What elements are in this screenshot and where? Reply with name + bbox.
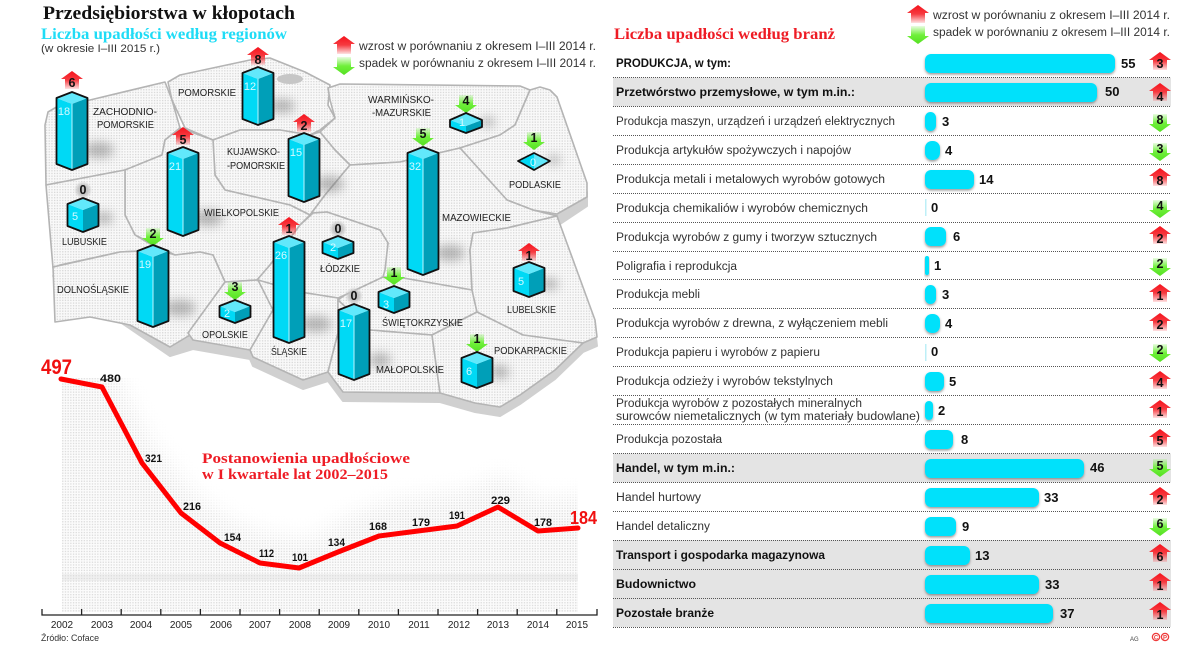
row: guma: 6 — [953, 229, 960, 244]
marker: małopolskie — [338, 287, 370, 380]
marker: lubelskie — [514, 243, 544, 297]
row: detal — [616, 517, 1171, 536]
region: kujawsko-pomorskie — [213, 130, 350, 215]
row: drewno: Produkcja wyrobów z drewna, z wyłączeniem mebli — [616, 318, 888, 330]
marker: dolnośląskie: 19 — [139, 259, 151, 271]
row: meble: Produkcja mebli — [616, 289, 700, 301]
row: guma: Produkcja wyrobów z gumy i tworzyw sztucznych — [616, 232, 877, 244]
dotted chart background — [62, 378, 578, 612]
row: spożywcze: Produkcja artykułów spożywczych i napojów — [616, 145, 852, 157]
grey row backgrounds — [613, 78, 1171, 627]
legend: map: spadek w porównaniu z okresem I–III 2014 r. — [359, 58, 596, 70]
row dividers — [613, 78, 1171, 628]
row: papier — [616, 343, 1171, 362]
region: łódzkie — [257, 212, 388, 298]
row: meble — [616, 284, 1171, 304]
year labels: 2003 — [91, 620, 114, 631]
row: produkcja — [616, 52, 1171, 73]
map labels: PODLASKIE — [509, 179, 561, 191]
row: przetwórstwo: 50 — [1105, 84, 1119, 99]
row: transport: 13 — [975, 548, 989, 563]
row: handel: 46 — [1090, 460, 1104, 475]
year labels: 2008 — [289, 620, 312, 631]
row: budownictwo: 1 — [1157, 579, 1164, 593]
row: spożywcze: 3 — [1157, 142, 1164, 156]
map labels: OPOLSKIE — [202, 329, 248, 341]
row: pozostałe: 1 — [1157, 608, 1164, 622]
row: pozostała: 5 — [1157, 434, 1164, 448]
marker: zachodniopomorskie — [56, 71, 88, 170]
map labels: LUBELSKIE — [507, 304, 556, 316]
lake — [277, 74, 303, 84]
row: pozostała: 8 — [961, 432, 968, 447]
period note: (w okresie I–III 2015 r.) — [41, 43, 160, 55]
marker: śląskie — [274, 217, 304, 343]
marker: warmińsko-mazurskie: 1 — [459, 117, 465, 129]
map labels: ŁÓDZKIE — [320, 262, 360, 275]
region: mazowieckie — [310, 148, 557, 290]
map labels: -POMORSKIE — [227, 160, 285, 172]
region: wielkopolskie — [125, 128, 310, 282]
row: pozostałe — [616, 602, 1171, 623]
row: maszyny: Produkcja maszyn, urządzeń i urządzeń elektrycznych — [616, 116, 895, 128]
row: hurt: 2 — [1157, 493, 1164, 507]
data labels: 229 — [491, 495, 510, 507]
legend: map: wzrost w porównaniu z okresem I–III 2014 r. — [358, 41, 596, 53]
row: minerały: 2 — [938, 403, 945, 418]
marker: pomorskie: 8 — [255, 53, 262, 67]
row: poligrafia — [616, 256, 1171, 276]
map labels: POMORSKIE — [178, 87, 236, 99]
data labels: 101 — [292, 552, 308, 564]
region: lubuskie — [46, 170, 160, 268]
year labels: 2009 — [328, 620, 351, 631]
row: drewno: 4 — [945, 316, 953, 331]
row: minerały: 1 — [1157, 405, 1164, 419]
marker: dolnośląskie — [138, 227, 168, 327]
row: transport: 6 — [1157, 550, 1164, 564]
marker: mazowieckie: 5 — [420, 127, 427, 141]
row: meble: 3 — [942, 287, 949, 302]
region: świętokrzyskie — [338, 277, 477, 335]
row: maszyny — [616, 112, 1171, 132]
row: hurt: Handel hurtowy — [616, 492, 701, 504]
row: przetwórstwo: Przetwórstwo przemysłowe, w tym m.in.: — [616, 87, 855, 99]
row: minerały — [616, 398, 1171, 423]
row: minerały: surowców niemetalicznych (w tym materiały budowlane) — [616, 411, 920, 423]
marker: warmińsko-mazurskie: 4 — [463, 94, 470, 108]
data labels: 321 — [145, 453, 162, 465]
row: odzież: Produkcja odzieży i wyrobów tekstylnych — [616, 376, 833, 388]
row: budownictwo: Budownictwo — [616, 579, 696, 591]
marker: małopolskie: 0 — [351, 289, 358, 303]
marker: opolskie: 3 — [232, 280, 239, 294]
data labels — [41, 356, 597, 564]
heading: industries: Liczba upadłości według branż — [614, 26, 835, 43]
chart title: Postanowienia upadłościowe — [202, 451, 411, 467]
row: drewno: 2 — [1157, 318, 1164, 332]
row: przetwórstwo: 4 — [1157, 90, 1164, 104]
marker: zachodniopomorskie: 18 — [58, 106, 70, 118]
row: papier: 0 — [931, 344, 938, 359]
year labels: 2014 — [527, 620, 550, 631]
row: poligrafia: 2 — [1157, 257, 1164, 271]
legend: industries: spadek w porównaniu z okresem I–III 2014 r. — [933, 27, 1170, 39]
row: handel: Handel, w tym m.in.: — [616, 463, 735, 475]
row: pozostałe: Pozostałe branże — [616, 608, 714, 620]
marker: świętokrzyskie: 1 — [391, 266, 398, 280]
row: guma — [616, 226, 1171, 246]
year labels: 2013 — [487, 620, 510, 631]
data labels: 216 — [183, 501, 201, 513]
year labels: 2015 — [566, 620, 589, 631]
row: hurt: 33 — [1044, 490, 1058, 505]
row: produkcja: PRODUKCJA, w tym: — [616, 58, 731, 70]
row: detal: 6 — [1157, 517, 1164, 531]
marker: łódzkie: 0 — [335, 222, 342, 236]
map labels: DOLNOŚLĄSKIE — [57, 283, 129, 296]
row: metale: 8 — [1157, 174, 1164, 188]
region: śląskie — [250, 280, 338, 380]
row: transport: Transport i gospodarka magazynowa — [616, 550, 826, 562]
row: guma: 2 — [1157, 232, 1164, 246]
marker: dolnośląskie: 2 — [150, 227, 157, 241]
row: drewno — [616, 313, 1171, 333]
row: budownictwo — [616, 573, 1171, 594]
row: odzież: 5 — [949, 374, 956, 389]
subtitle: regions: Liczba upadłości według regionów — [41, 26, 287, 43]
row: produkcja: 55 — [1121, 56, 1135, 71]
row: transport — [616, 544, 1171, 565]
marker: lubuskie: 0 — [80, 183, 87, 197]
map labels: WIELKOPOLSKIE — [204, 207, 279, 219]
row: meble: 1 — [1157, 289, 1164, 303]
region: opolskie — [188, 280, 273, 350]
region: małopolskie — [328, 300, 440, 393]
region: zachodniopomorskie — [45, 82, 180, 185]
map labels: ŚWIĘTOKRZYSKIE — [382, 316, 463, 329]
row: chemikalia: Produkcja chemikaliów i wyrobów chemicznych — [616, 203, 868, 215]
row: poligrafia: 1 — [934, 258, 941, 273]
marker: lubelskie: 1 — [526, 249, 533, 263]
marker: łódzkie — [322, 220, 354, 259]
marker: podkarpackie — [462, 332, 492, 388]
marker: świętokrzyskie — [378, 266, 410, 313]
row: papier: 2 — [1157, 343, 1164, 357]
map labels: POMORSKIE — [97, 119, 154, 131]
map labels: MAŁOPOLSKIE — [376, 364, 444, 376]
data labels: 154 — [224, 532, 242, 544]
data labels: 168 — [369, 521, 387, 533]
row: spożywcze — [616, 141, 1171, 161]
logo: P — [1163, 636, 1167, 642]
data line — [61, 379, 578, 568]
row: produkcja: 3 — [1157, 57, 1164, 71]
year labels: 2007 — [249, 620, 272, 631]
year labels: 2002 — [51, 620, 74, 631]
data labels: 184 — [570, 508, 597, 528]
marker: opolskie: 2 — [224, 308, 230, 320]
author credit: AG — [1130, 637, 1139, 643]
source: Źródło: Coface — [41, 633, 99, 644]
legend: industries — [907, 5, 1170, 44]
legend: industries: wzrost w porównaniu z okresem I–III 2014 r. — [932, 10, 1170, 22]
logo: C — [1154, 636, 1159, 642]
map labels: ŚLĄSKIE — [271, 345, 307, 358]
marker: pomorskie: 12 — [244, 81, 256, 93]
line chart: bankruptcy rulings 2002–2015 — [41, 356, 597, 631]
year labels: 2010 — [368, 620, 391, 631]
row: detal: Handel detaliczny — [616, 521, 710, 533]
region: pomorskie — [168, 58, 335, 140]
year labels — [51, 620, 589, 631]
data labels: 178 — [534, 517, 552, 529]
marker: kujawsko-pomorskie — [288, 114, 320, 202]
marker: warmińsko-mazurskie — [450, 94, 482, 133]
row: detal: 9 — [962, 519, 969, 534]
chart title — [202, 451, 411, 483]
row: budownictwo: 33 — [1045, 577, 1059, 592]
year labels: 2006 — [210, 620, 233, 631]
row: metale — [616, 168, 1171, 189]
map labels: MAZOWIECKIE — [442, 212, 511, 224]
year labels: 2012 — [448, 620, 471, 631]
map labels: -MAZURSKIE — [372, 107, 431, 119]
title: Przedsiębiorstwa w kłopotach — [43, 3, 295, 24]
map labels: ZACHODNIO- — [93, 106, 157, 118]
data labels: 112 — [259, 548, 274, 560]
year labels: 2011 — [408, 620, 430, 631]
marker: mazowieckie — [408, 127, 438, 275]
logo — [1152, 633, 1169, 642]
data labels: 497 — [41, 356, 72, 379]
marker: wielkopolskie: 21 — [169, 161, 181, 173]
row: pozostała — [616, 429, 1171, 449]
chart title: w I kwartale lat 2002–2015 — [202, 467, 388, 483]
data labels: 134 — [328, 537, 346, 549]
region: podkarpackie — [432, 312, 583, 407]
row: przetwórstwo — [616, 83, 1171, 104]
data labels: 480 — [100, 373, 121, 385]
marker: lubuskie: 5 — [72, 211, 78, 223]
row: minerały: Produkcja wyrobów z pozostałych mineralnych — [616, 398, 862, 410]
marker: opolskie — [220, 280, 250, 323]
region: dolnośląskie — [53, 250, 225, 347]
row: metale: Produkcja metali i metalowych wyrobów gotowych — [616, 174, 885, 186]
marker: kujawsko-pomorskie: 15 — [290, 147, 302, 159]
marker: podkarpackie: 6 — [466, 366, 472, 378]
marker: łódzkie: 2 — [330, 242, 336, 254]
row: chemikalia — [616, 199, 1171, 218]
map labels — [57, 87, 567, 376]
marker: śląskie: 1 — [286, 222, 293, 236]
row: poligrafia: Poligrafia i reprodukcja — [616, 261, 738, 273]
row: maszyny: 8 — [1157, 113, 1164, 127]
marker: świętokrzyskie: 3 — [383, 299, 389, 311]
row: metale: 14 — [979, 172, 994, 187]
row: odzież: 4 — [1157, 376, 1164, 390]
marker: podlaskie — [518, 131, 550, 170]
region: warmińsko-mazurskie — [320, 84, 530, 165]
region: podlaskie — [460, 87, 587, 214]
marker: wielkopolskie — [168, 127, 198, 236]
row: hurt — [616, 487, 1171, 507]
marker: śląskie: 26 — [275, 250, 287, 262]
row: handel — [616, 459, 1171, 478]
marker: lubuskie — [68, 181, 98, 232]
region: lubelskie — [470, 216, 597, 343]
marker: kujawsko-pomorskie: 2 — [301, 119, 308, 133]
row: pozostałe: 37 — [1060, 606, 1074, 621]
row: chemikalia: 0 — [931, 200, 938, 215]
data labels: 191 — [449, 510, 465, 522]
map labels: PODKARPACKIE — [494, 345, 567, 357]
map shadows of bars — [84, 99, 560, 379]
marker: pomorskie — [242, 47, 274, 125]
year labels: 2005 — [170, 620, 193, 631]
marker: podkarpackie: 1 — [474, 332, 481, 346]
row: handel: 5 — [1157, 459, 1164, 473]
map labels: LUBUSKIE — [62, 236, 107, 248]
legend: map — [333, 36, 596, 75]
row: papier: Produkcja papieru i wyrobów z papieru — [616, 347, 820, 359]
row: pozostała: Produkcja pozostała — [616, 434, 723, 446]
map labels: KUJAWSKO- — [227, 146, 280, 158]
row: maszyny: 3 — [942, 114, 949, 129]
marker: zachodniopomorskie: 6 — [69, 76, 76, 90]
row: odzież — [616, 371, 1171, 391]
map of Poland regions — [45, 58, 597, 416]
data labels: 179 — [412, 517, 430, 529]
axis — [42, 609, 597, 615]
row: chemikalia: 4 — [1157, 199, 1164, 213]
marker: lubelskie: 5 — [518, 276, 524, 288]
year labels: 2004 — [130, 620, 153, 631]
marker: podlaskie: 1 — [531, 131, 538, 145]
marker: wielkopolskie: 5 — [180, 133, 187, 147]
row: spożywcze: 4 — [945, 143, 953, 158]
map labels: WARMIŃSKO- — [368, 93, 434, 106]
marker: podlaskie: 0 — [530, 157, 536, 169]
marker: małopolskie: 17 — [340, 318, 352, 330]
marker: mazowieckie: 32 — [409, 161, 421, 173]
